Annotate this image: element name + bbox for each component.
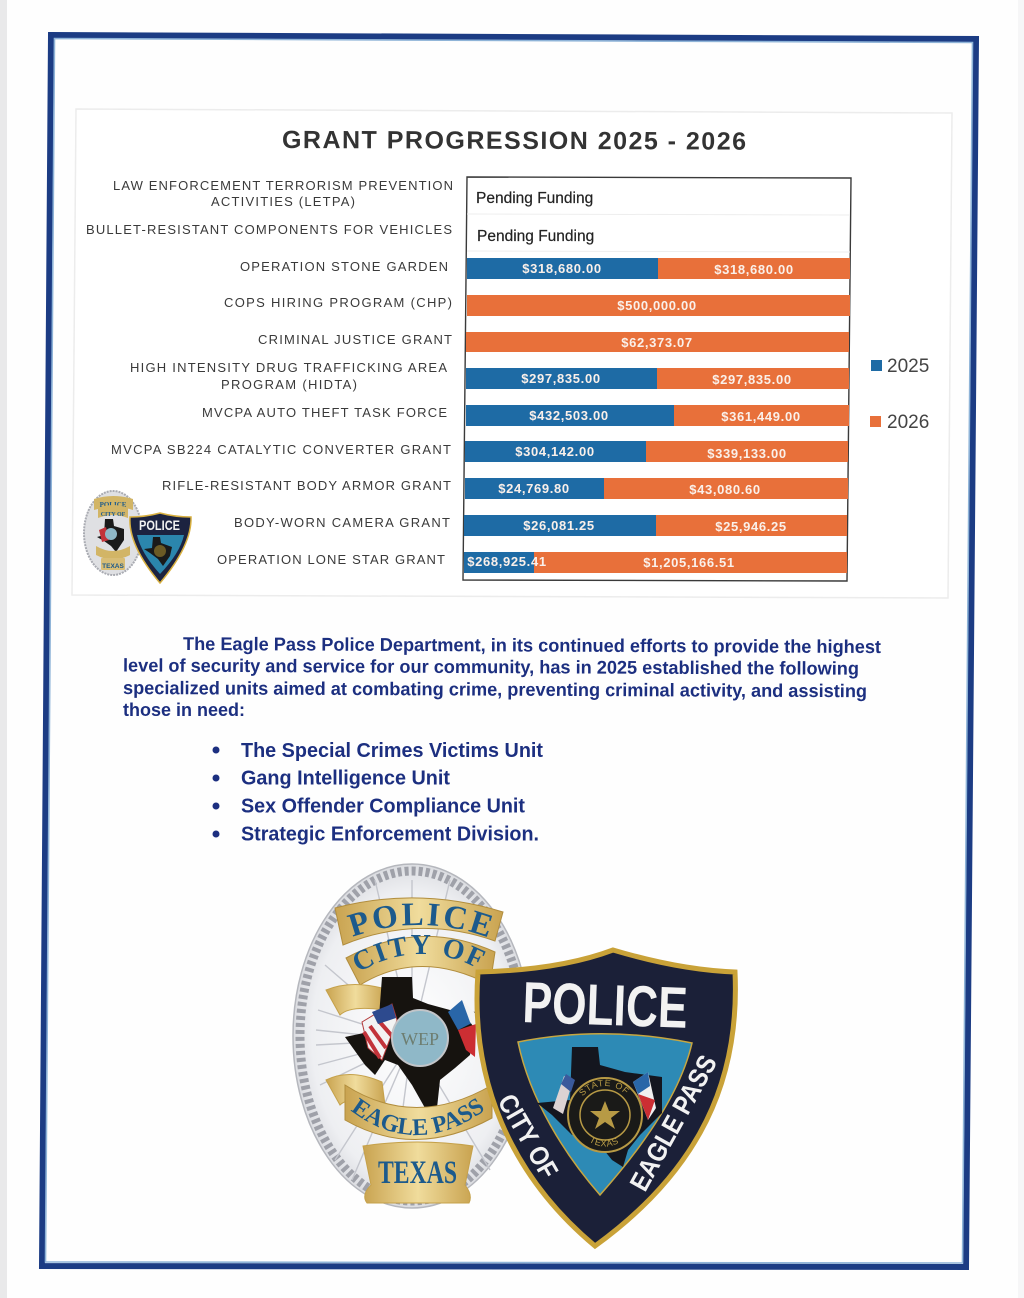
bar: auto theft task force: [466, 405, 849, 426]
specialized units list: The Special Crimes Victims Unit: [241, 740, 543, 762]
texas flag: [448, 1000, 478, 1057]
bar: cops hiring program: $500,000.00: [617, 298, 697, 313]
bar: sb224 catalytic converter: $304,142.00: [515, 444, 595, 459]
chart title: GRANT PROGRESSION 2025 - 2026: [282, 126, 746, 156]
bar: operation lone star: $268,925.41: [467, 554, 547, 569]
grant name labels: RIFLE-RESISTANT BODY ARMOR GRANT: [162, 478, 451, 493]
small police badge and patch logo: POLICE: [139, 518, 180, 533]
patch state seal: TEXAS: [591, 1138, 618, 1147]
patch police title: POLICE: [522, 970, 689, 1041]
grant name labels: ACTIVITIES (LETPA): [211, 194, 355, 209]
patch eagle pass text: EAGLE PASS: [624, 1050, 723, 1196]
texas plaque: [363, 1142, 473, 1203]
grant name labels: MVCPA SB224 CATALYTIC CONVERTER GRANT: [111, 442, 451, 457]
icon: police badge: [292, 863, 522, 1209]
bar: hidta: [466, 368, 849, 389]
badge sunburst rays: [316, 880, 510, 1180]
intro paragraph: The Eagle Pass Police Department, in its continued efforts to provide the highest: [183, 633, 881, 657]
small police badge and patch logo: CITY OF: [101, 512, 126, 518]
legend: 2026: [887, 412, 929, 433]
patch texas silhouette: [537, 1047, 662, 1167]
bar: hidta: $297,835.00: [712, 372, 792, 387]
texas plaque: TEXAS: [378, 1155, 457, 1191]
grant name labels: CRIMINAL JUSTICE GRANT: [258, 332, 452, 347]
bar: criminal justice grant: [466, 332, 849, 352]
bar: operation lone star: $1,205,166.51: [643, 555, 735, 570]
police ribbon: POLICE: [346, 904, 492, 937]
bar: criminal justice grant: $62,373.07: [621, 335, 693, 350]
legend: 2025: [887, 356, 929, 377]
grant name labels: LAW ENFORCEMENT TERRORISM PREVENTION: [113, 178, 453, 193]
texas silhouette: [345, 977, 477, 1108]
patch blue shield: [518, 1034, 692, 1195]
grant name labels: OPERATION STONE GARDEN: [240, 259, 448, 274]
bar: operation stone garden: [467, 258, 850, 279]
intro paragraph: [123, 633, 881, 720]
side ribbons: [326, 984, 385, 1105]
icon: police patch: [474, 947, 738, 1250]
legend: [870, 356, 929, 433]
bar: cops hiring program: [467, 295, 850, 316]
specialized units list: Sex Offender Compliance Unit: [241, 796, 525, 818]
grant name labels: OPERATION LONE STAR GRANT: [217, 552, 445, 567]
grant name labels: [86, 178, 453, 567]
pending rows: [476, 190, 594, 245]
grant name labels: PROGRAM (HIDTA): [221, 377, 357, 392]
eagle pass ribbon: EAGLE PASS: [350, 1098, 484, 1136]
specialized units list: Gang Intelligence Unit: [241, 768, 450, 790]
grant name labels: COPS HIRING PROGRAM (CHP): [224, 295, 452, 310]
small police badge and patch logo: [84, 491, 191, 583]
bar: body-worn camera: $26,081.25: [523, 518, 595, 533]
intro paragraph: specialized units aimed at combating crime, preventing criminal activity, and assisting: [123, 677, 867, 701]
patch flags: [553, 1072, 656, 1120]
bar: sb224 catalytic converter: [465, 441, 848, 462]
bar: body-worn camera: $25,946.25: [715, 519, 787, 534]
small police badge and patch logo: POLICE: [100, 501, 127, 509]
panel: grant progression chart: [72, 109, 952, 598]
specialized units list: [212, 740, 543, 846]
intro paragraph: those in need:: [123, 699, 245, 720]
small police badge and patch logo: TEXAS: [102, 563, 124, 570]
intro paragraph: level of security and service for our community, has in 2025 established the following: [123, 655, 859, 679]
bar: operation lone star: [464, 552, 847, 573]
bar chart: [463, 177, 851, 581]
bar: rifle-resistant body armor: [465, 478, 848, 499]
bar: auto theft task force: $432,503.00: [529, 408, 609, 423]
bar: auto theft task force: $361,449.00: [721, 409, 801, 424]
bar: rifle-resistant body armor: $24,769.80: [498, 481, 570, 496]
patch state seal: STATE OF: [579, 1080, 630, 1096]
grant name labels: HIGH INTENSITY DRUG TRAFFICKING AREA: [130, 360, 447, 375]
city of ribbon: CITY OF: [354, 935, 486, 970]
pending rows: Pending Funding: [477, 228, 594, 245]
bar: operation stone garden: $318,680.00: [714, 262, 794, 277]
bar: operation stone garden: $318,680.00: [522, 261, 602, 276]
city seal: [392, 1010, 448, 1066]
patch city of text: CITY OF: [492, 1089, 564, 1184]
us flag: [362, 1004, 397, 1060]
specialized units list: Strategic Enforcement Division.: [241, 824, 539, 846]
patch state seal: [567, 1077, 643, 1153]
bar: sb224 catalytic converter: $339,133.00: [707, 446, 787, 461]
bar: rifle-resistant body armor: $43,080.60: [689, 482, 761, 497]
bar: hidta: $297,835.00: [521, 371, 601, 386]
grant name labels: BODY-WORN CAMERA GRANT: [234, 515, 450, 530]
grant name labels: BULLET-RESISTANT COMPONENTS FOR VEHICLES: [86, 222, 452, 237]
pending rows: Pending Funding: [476, 190, 593, 207]
city seal: WEP: [401, 1029, 439, 1049]
bar: body-worn camera: [464, 515, 847, 536]
grant name labels: MVCPA AUTO THEFT TASK FORCE: [202, 405, 447, 420]
